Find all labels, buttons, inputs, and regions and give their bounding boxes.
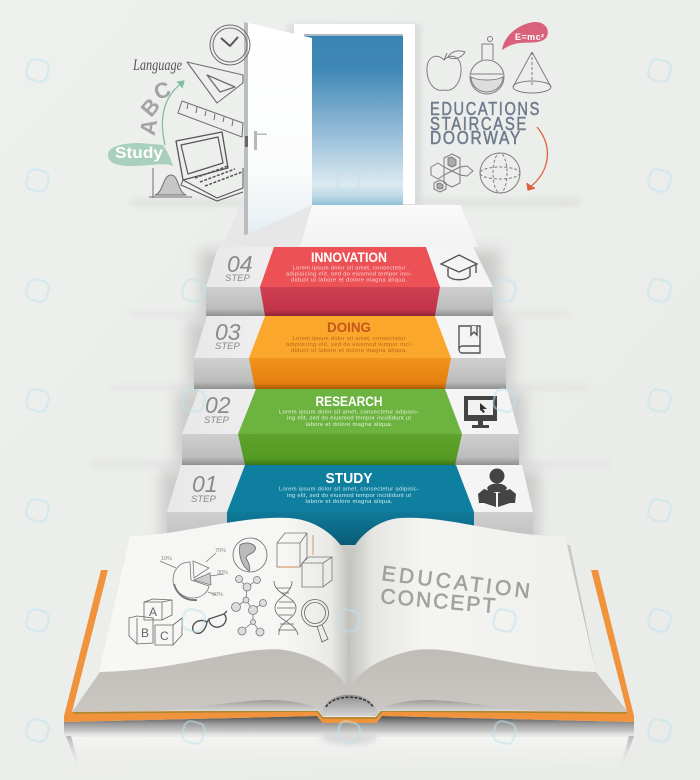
- heading: educations staircase doorway: STAIRCASE: [430, 114, 528, 134]
- icon: laptop: [176, 132, 243, 201]
- step surface: [194, 316, 506, 358]
- left page: [99, 518, 348, 690]
- reflection: [64, 716, 634, 775]
- icon: hexagons: [431, 154, 473, 192]
- icon: person reading: [478, 468, 516, 507]
- open book: [64, 518, 634, 775]
- right doodles: [427, 22, 551, 193]
- step 03: STEP: [215, 341, 240, 352]
- page doodles: 30%: [217, 570, 228, 576]
- step 03: [194, 316, 506, 389]
- green band: ing elit, sed do eiusmod tempor incididunt ut: [287, 416, 411, 422]
- step number: 03: [215, 319, 241, 345]
- spine: [323, 695, 376, 716]
- orange band: DOING: [327, 319, 371, 335]
- icon: set square: [187, 62, 243, 103]
- study tag: [108, 143, 173, 166]
- heading: educations staircase doorway: [430, 99, 541, 148]
- step 04: [206, 247, 493, 316]
- study tag: Study: [115, 145, 163, 162]
- green band: [238, 389, 462, 465]
- page doodles: C: [160, 629, 169, 643]
- icon: cubes: [277, 533, 332, 587]
- orange band: [249, 316, 451, 389]
- icon: ruler: [178, 101, 243, 137]
- orange band: Lorem ipsum dolor sit amet, consectetur: [292, 336, 406, 342]
- red band: didunt ut labore et dolore magna aliqua.: [291, 278, 407, 284]
- door handle: [254, 131, 267, 150]
- left doodles: [108, 25, 250, 201]
- orange band: adipisicing elit, sed do eiusmod tempor inci-: [286, 342, 412, 348]
- page doodles: A: [149, 605, 157, 619]
- red band: INNOVATION: [311, 250, 387, 265]
- icon: pie chart: [160, 553, 224, 600]
- icon: abc blocks: [129, 599, 182, 645]
- wall shadows: [90, 199, 610, 560]
- doorway: [222, 22, 478, 247]
- door leaf: [244, 22, 312, 235]
- icon: apple: [427, 51, 465, 90]
- page doodles: 70%: [215, 548, 226, 554]
- icon: glasses: [193, 611, 227, 633]
- red band: [260, 247, 440, 316]
- door frame: [294, 24, 415, 204]
- icon: magnifier: [302, 600, 328, 642]
- step surface: [182, 389, 519, 434]
- icon: book: [459, 326, 480, 353]
- blue band: STUDY: [326, 470, 372, 487]
- heading: education concept: CONCEPT: [380, 585, 496, 618]
- arrow: green arc: [162, 81, 184, 145]
- lower page curves: [160, 700, 538, 711]
- blue band: ing elit, sed do eiusmod tempor incididunt ut: [287, 493, 411, 499]
- red band: adipisicing elit, sed do eiusmod tempor inci-: [286, 272, 412, 278]
- blue band: [227, 465, 474, 570]
- icon: bell chart: [149, 168, 192, 198]
- abc letters: C: [150, 76, 174, 105]
- right page: [349, 518, 596, 690]
- page doodles: [129, 533, 332, 645]
- blue band: labore et dolore magna aliqua.: [306, 499, 393, 505]
- step surface: [206, 247, 493, 287]
- step 01: [167, 465, 533, 570]
- page doodles: B: [141, 626, 149, 640]
- red band: Lorem ipsum dolor sit amet, consectetur: [292, 266, 406, 272]
- icon: dna: [274, 581, 298, 635]
- page doodles: 20%: [212, 592, 223, 598]
- abc letters: A: [135, 117, 162, 137]
- page block: [72, 545, 628, 716]
- arrow: red curve: [527, 127, 547, 190]
- icon: molecule: [232, 576, 266, 636]
- abc letters: [135, 76, 174, 137]
- icon: clock: [210, 25, 250, 65]
- step number: 04: [227, 251, 253, 277]
- heading: education concept: EDUCATION: [380, 562, 531, 603]
- step surface: [167, 465, 533, 512]
- heading: educations staircase doorway: EDUCATIONS: [430, 99, 541, 119]
- orange cover: [64, 570, 634, 723]
- step number: 02: [205, 392, 231, 418]
- green band: Lorem ipsum dolor sit amet, consectetur adipisic-: [279, 410, 419, 416]
- step 01: STEP: [191, 494, 216, 505]
- heading: educations staircase doorway: DOORWAY: [430, 128, 522, 148]
- abc letters: B: [136, 93, 165, 121]
- icon: globe: [233, 538, 267, 572]
- green band: labore et dolore magna aliqua.: [306, 422, 393, 428]
- icon: cone: [513, 52, 551, 93]
- step 02: STEP: [204, 415, 229, 426]
- icon: computer monitor: [464, 396, 497, 428]
- e=mc2 bubble: [502, 22, 548, 50]
- icon: graduation cap: [441, 255, 477, 280]
- green band: RESEARCH: [316, 393, 382, 409]
- orange band: didunt ut labore et dolore magna aliqua.: [291, 348, 407, 354]
- step 04: STEP: [225, 273, 250, 284]
- blue band: Lorem ipsum dolor sit amet, consectetur adipisic-: [279, 486, 419, 492]
- icon: sphere: [480, 153, 520, 193]
- icon: flask: [470, 36, 504, 94]
- page doodles: 10%: [161, 556, 172, 562]
- step 02: [182, 389, 519, 465]
- e=mc2 bubble: E=mc²: [515, 32, 544, 42]
- door floor: [222, 205, 478, 247]
- step number: 01: [192, 471, 218, 497]
- language label: Language: [132, 57, 182, 74]
- sky opening: [304, 35, 403, 205]
